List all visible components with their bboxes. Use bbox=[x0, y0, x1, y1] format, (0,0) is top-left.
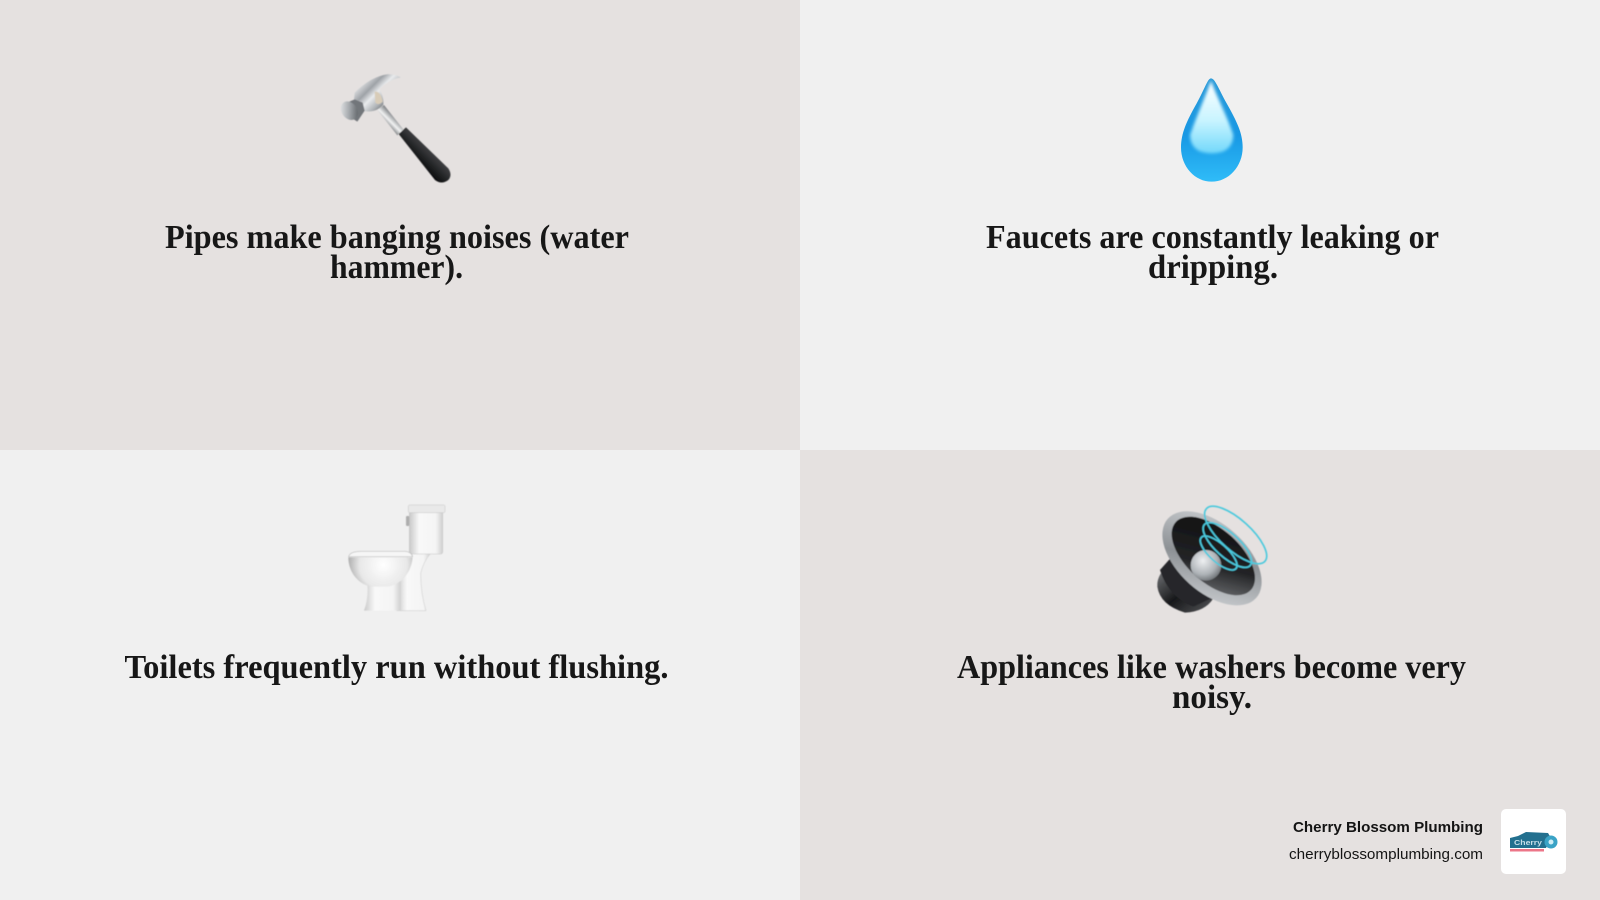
footer: brand text bbox=[1289, 819, 1483, 863]
heading: toilets: Toilets frequently run without flushing. bbox=[124, 649, 668, 686]
heading: faucets: dripping. bbox=[1148, 249, 1278, 286]
heading: pipes: Pipes make banging noises (water bbox=[165, 219, 629, 256]
icon: speaker bbox=[1145, 493, 1279, 623]
heading: pipes bbox=[165, 219, 629, 286]
panel: faucets leaking bbox=[800, 0, 1600, 450]
icon: water drop bbox=[1181, 78, 1243, 182]
heading: faucets bbox=[986, 219, 1439, 286]
panel: toilets running bbox=[0, 450, 800, 900]
heading: faucets: Faucets are constantly leaking or bbox=[986, 219, 1439, 256]
heading: appliances: noisy. bbox=[1172, 679, 1252, 716]
panel: noisy appliances bbox=[800, 450, 1600, 900]
heading: appliances: Appliances like washers become very bbox=[957, 649, 1466, 686]
footer: brand text: Cherry Blossom Plumbing bbox=[1293, 819, 1483, 836]
heading: pipes: hammer). bbox=[330, 249, 463, 286]
footer: brand text: cherryblossomplumbing.com bbox=[1289, 846, 1483, 863]
icon: toilet bbox=[348, 505, 445, 611]
heading: appliances bbox=[957, 649, 1466, 716]
footer: logo bbox=[1501, 809, 1566, 874]
icon: hammer bbox=[337, 74, 450, 182]
footer: logo: Cherry bbox=[1514, 840, 1542, 847]
panel: pipes banging bbox=[0, 0, 800, 450]
